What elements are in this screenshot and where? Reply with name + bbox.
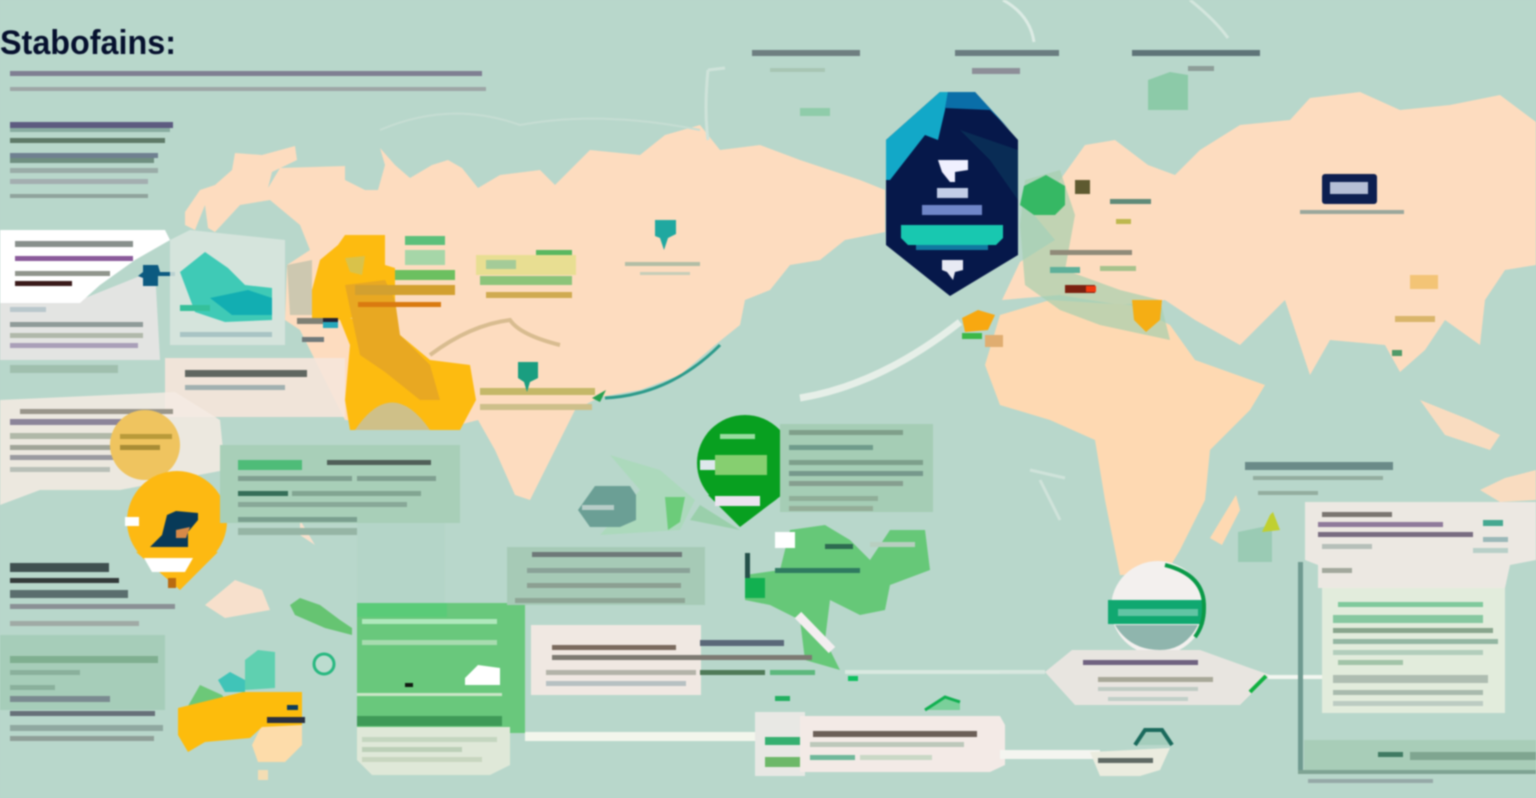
green landmass: Oceania <box>745 525 930 670</box>
panel: bottom left green text <box>0 635 165 741</box>
green map overlay: Europe <box>1020 170 1170 340</box>
connector and small badge bottom right <box>1000 730 1172 776</box>
panel: left callout white <box>0 230 170 373</box>
pin: teal marker <box>625 220 700 275</box>
panel: green text card <box>220 445 460 603</box>
icon: green square <box>1148 72 1188 110</box>
icon: grey circle with green shape <box>578 455 695 535</box>
panel: left middle text <box>0 392 225 505</box>
header captions top <box>752 50 1260 116</box>
title: Stabofains: <box>0 24 176 62</box>
landmass: Africa <box>985 300 1265 575</box>
world map landmasses <box>185 92 1536 670</box>
panel: green text beside badge <box>780 424 933 512</box>
icon: small yellow pin <box>1238 512 1280 562</box>
route lines and arrows <box>380 0 1228 520</box>
subtitle block <box>10 71 486 91</box>
yellow region with labels <box>287 235 476 430</box>
green ribbon island <box>290 598 352 635</box>
icon: navy marker <box>138 265 175 286</box>
white dot and dark stem <box>745 532 915 598</box>
landmass: western isthmus <box>205 520 315 618</box>
panel: hexagon caption <box>1000 650 1270 705</box>
panel: centre green text <box>507 547 705 605</box>
panel: teal map region <box>170 230 285 345</box>
globe badge <box>1108 561 1205 655</box>
diagonal white strip and connector to right <box>798 615 1045 681</box>
hexagonal navy badge <box>886 92 1018 296</box>
panel: bottom white caption with icon <box>755 696 1005 776</box>
panel: green landscape card <box>357 603 525 775</box>
landmass: northern continent <box>185 125 885 500</box>
panel: right lower text card <box>1322 588 1505 713</box>
connector: white band <box>525 732 765 741</box>
landmass: south-east islands <box>1420 400 1536 502</box>
map: Australia with yellow highlight <box>178 650 334 780</box>
panel: white caption centre <box>531 625 815 695</box>
panel: peach caption <box>165 358 345 417</box>
europe markers <box>962 175 1162 347</box>
pin: yellow with figure <box>125 471 227 590</box>
panel: right top white card <box>1305 502 1536 588</box>
vertical rule right panel <box>1298 562 1536 774</box>
navy tag: east Asia <box>1300 174 1404 214</box>
pin: green marker <box>518 362 538 392</box>
connector to right panel <box>1250 675 1323 692</box>
panel: right bottom green strip <box>1304 740 1536 783</box>
markers: south Asia <box>1392 275 1438 356</box>
text block: bottom left heading <box>10 563 175 626</box>
landmass: Eurasia east <box>1002 92 1536 375</box>
landmass: Madagascar <box>1210 495 1240 545</box>
pin: green badge <box>690 415 793 530</box>
label group: yellow region captions <box>355 236 595 410</box>
text block: top left <box>10 122 173 198</box>
text block: right ocean <box>1245 462 1393 495</box>
